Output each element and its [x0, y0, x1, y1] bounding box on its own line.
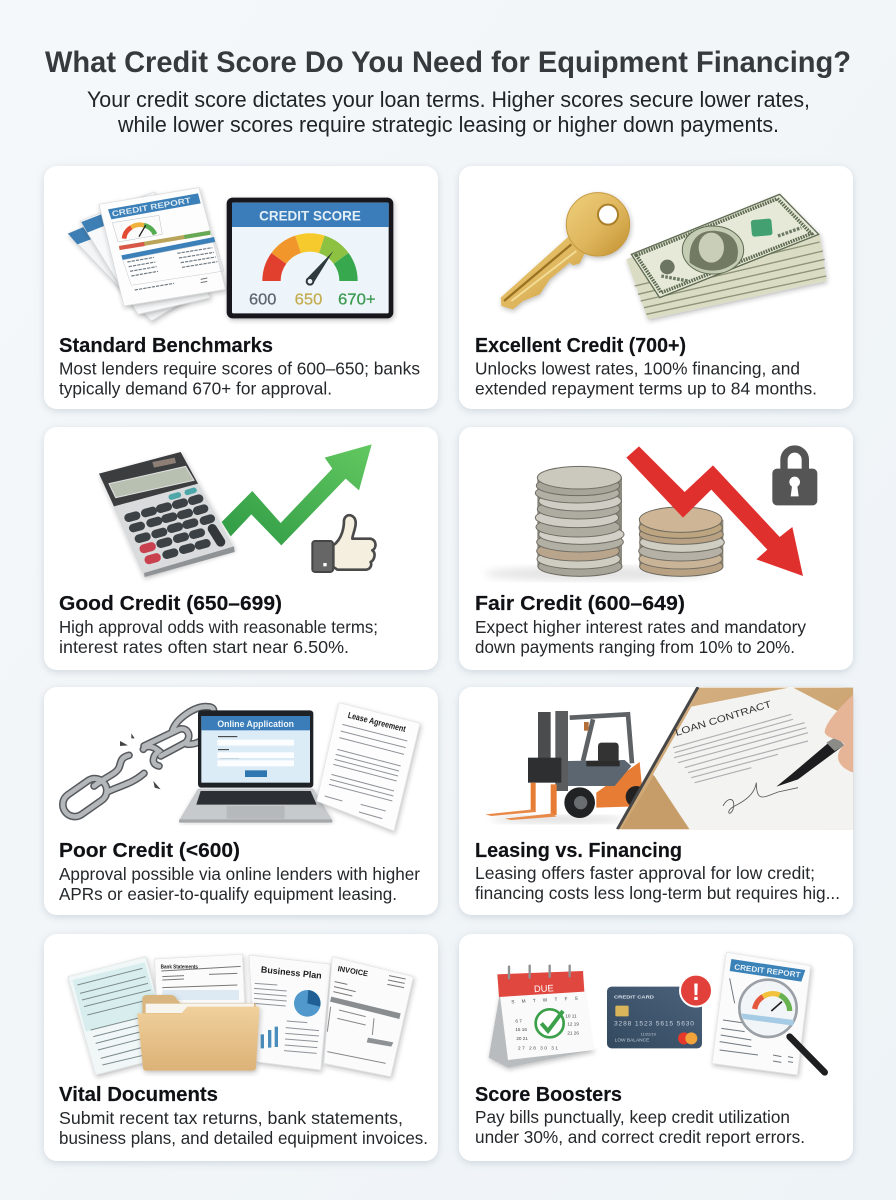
calendar with due date check: 10 11: [565, 1013, 577, 1018]
stack of credit report papers: [68, 188, 226, 321]
calendar with due date check: [489, 966, 595, 1068]
tax form: [68, 957, 172, 1075]
body text: financing costs less long-term but requires hig...: [475, 883, 840, 903]
green arrow: [222, 444, 372, 545]
heading: Score Boosters: [475, 1083, 622, 1106]
heading: Leasing vs. Financing: [475, 839, 682, 862]
body text: [475, 617, 806, 657]
body text: Expect higher interest rates and mandatory: [475, 617, 806, 637]
lease agreement paper: Lease Agreement: [347, 710, 407, 734]
body text: Submit recent tax returns, bank statements,: [59, 1108, 403, 1128]
credit card: [607, 987, 702, 1048]
illustration: credit reports and score tablet: [68, 188, 393, 321]
panel: standard benchmarks: [44, 166, 438, 409]
body text: Most lenders require scores of 600–650; banks: [59, 358, 420, 378]
tablet: credit score gauge: CREDIT SCORE: [259, 209, 361, 224]
tablet: credit score gauge: 600: [249, 291, 276, 308]
calendar with due date check: S M T W T F S: [511, 996, 578, 1004]
heading: Poor Credit (<600): [59, 839, 240, 862]
body text: typically demand 670+ for approval.: [59, 378, 332, 398]
invoice: [324, 957, 413, 1077]
calculator: [99, 452, 235, 577]
contract scene: LOAN CONTRACT: [674, 699, 773, 739]
business plan: Business Plan: [260, 964, 322, 981]
body text: [59, 1108, 428, 1148]
tablet: credit score gauge: 650: [295, 291, 322, 308]
stack of dollar bills: [626, 194, 826, 319]
illustration: calculator, arrow and thumb: [99, 444, 376, 577]
credit card: 3288 1523 5615 5630: [614, 1020, 694, 1027]
panel: score boosters: [459, 934, 853, 1161]
credit card: LOW BALANCE: [615, 1037, 649, 1042]
illustration: documents and folder: [68, 954, 413, 1077]
body text: Leasing offers faster approval for low credit;: [475, 863, 815, 883]
panel: vital documents: [44, 934, 438, 1161]
body text: High approval odds with reasonable terms;: [59, 617, 378, 637]
invoice: INVOICE: [337, 964, 369, 978]
illustration: calendar, credit card and report: [489, 952, 825, 1075]
calendar with due date check: 12 19: [567, 1022, 579, 1027]
calendar with due date check: 20 21: [516, 1036, 528, 1041]
body text: APRs or easier-to-qualify equipment leasing.: [59, 884, 397, 904]
icon: padlock: [772, 449, 817, 505]
body text: interest rates often start near 6.50%.: [59, 637, 349, 657]
body text: [59, 617, 378, 657]
heading: Good Credit (650–699): [59, 592, 282, 615]
red down arrow: [626, 446, 803, 576]
credit card: CREDIT CARD: [614, 994, 655, 999]
panel: excellent credit: [459, 166, 853, 409]
forklift: [485, 711, 647, 823]
illustration: broken chain, laptop and lease: [58, 703, 420, 831]
icon: alert badge: !: [692, 979, 700, 1006]
body text: [475, 863, 840, 903]
panel: poor credit: [44, 687, 438, 915]
business plan: [249, 955, 331, 1070]
manila folder: [137, 995, 259, 1071]
broken chain: [58, 707, 214, 821]
panel: good credit: [44, 427, 438, 670]
calendar with due date check: 6 7: [515, 1018, 522, 1023]
body text: extended repayment terms up to 84 months.: [475, 378, 817, 398]
body text: Approval possible via online lenders with higher: [59, 864, 420, 884]
body text: Pay bills punctually, keep credit utilization: [475, 1107, 790, 1127]
body text: down payments ranging from 10% to 20%.: [475, 637, 795, 657]
tall coin stack: [535, 466, 624, 576]
credit report with magnifier: CREDIT REPORT: [734, 962, 801, 979]
bank statements: [155, 954, 245, 1003]
credit card: 11/22/19: [641, 1031, 657, 1036]
heading: Fair Credit (600–649): [475, 592, 685, 615]
subtitle: while lower scores require strategic leasing or higher down payments.: [117, 112, 779, 137]
title: What Credit Score Do You Need for Equipment Financing?: [45, 46, 851, 79]
subtitle: Your credit score dictates your loan terms. Higher scores secure lower rates,: [87, 87, 810, 112]
credit report with magnifier: [712, 952, 825, 1075]
lease agreement paper: [317, 703, 420, 831]
heading: Standard Benchmarks: [59, 334, 273, 357]
laptop: [179, 710, 332, 823]
panel: fair credit: [459, 427, 853, 670]
calendar with due date check: 27 28 30 31: [518, 1045, 558, 1050]
body text: [475, 1107, 805, 1147]
tablet: credit score gauge: [227, 198, 393, 318]
tablet: credit score gauge: 670+: [338, 291, 376, 308]
bank statements: Bank Statements: [161, 964, 198, 970]
illustration: forklift and loan contract: [485, 687, 853, 829]
body text: business plans, and detailed equipment invoices.: [59, 1128, 428, 1148]
calendar with due date check: DUE: [534, 983, 554, 994]
calendar with due date check: 21 26: [567, 1030, 579, 1035]
laptop: Online Application: [217, 719, 294, 729]
body text: [475, 358, 817, 398]
subtitle: [87, 87, 810, 137]
heading: Vital Documents: [59, 1083, 218, 1106]
icon: thumbs up: [312, 515, 376, 572]
gold key: [501, 193, 630, 309]
body text: Unlocks lowest rates, 100% financing, and: [475, 358, 800, 378]
calendar with due date check: 15 16: [515, 1027, 527, 1032]
body text: under 30%, and correct credit report errors.: [475, 1127, 805, 1147]
illustration: key and cash: [501, 193, 826, 319]
short coin stack: [639, 507, 724, 576]
icon: alert badge: [680, 975, 712, 1007]
illustration: coin stacks, falling arrow and lock: [485, 446, 817, 581]
stack of credit report papers: CREDIT REPORT: [111, 196, 192, 219]
heading: Excellent Credit (700+): [475, 334, 686, 357]
body text: [59, 864, 420, 904]
panel: leasing vs financing: [459, 687, 853, 915]
body text: [59, 358, 420, 398]
contract scene: [617, 687, 853, 829]
